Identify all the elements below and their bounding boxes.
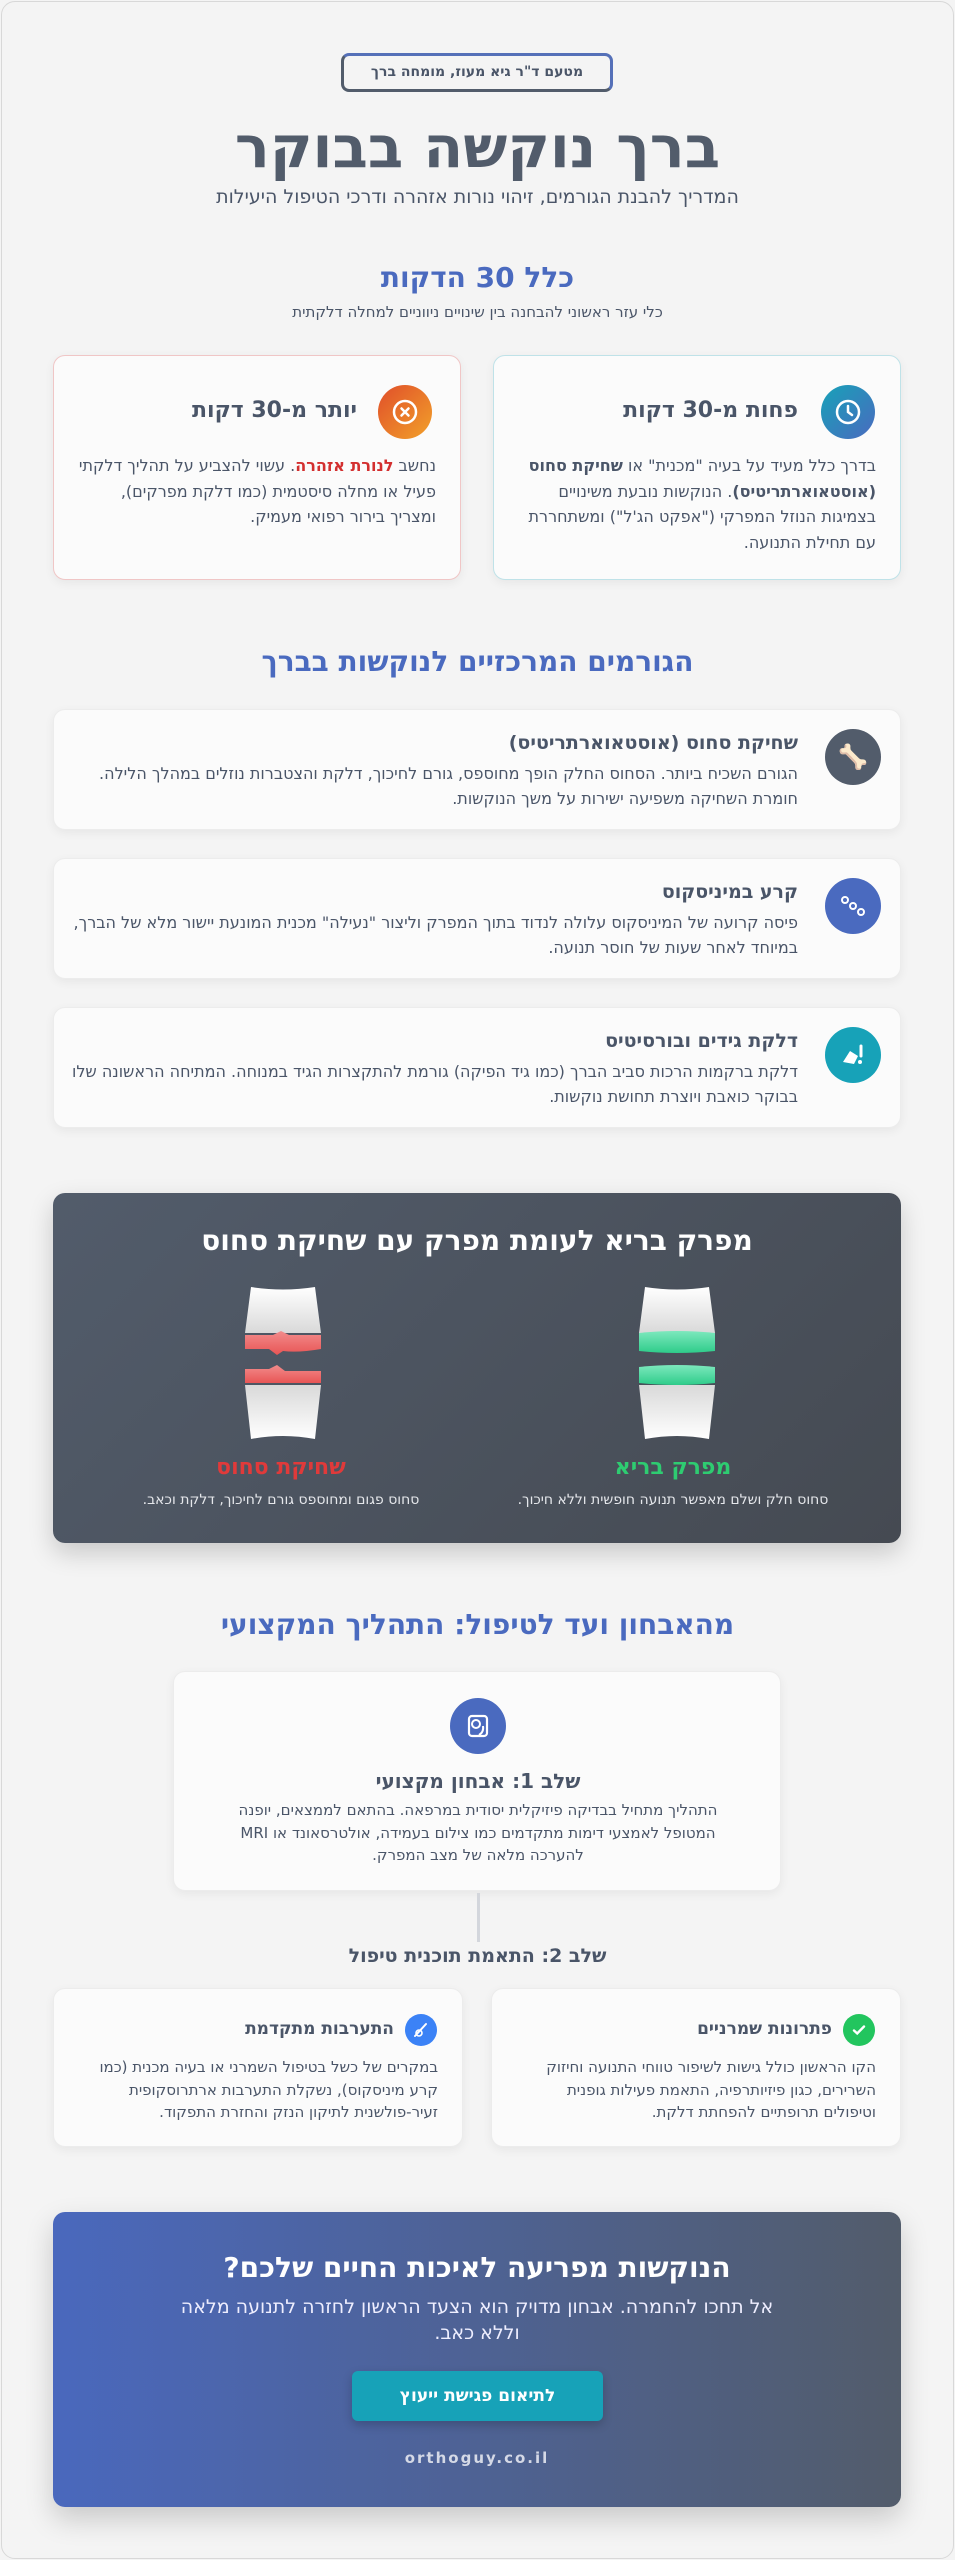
badge: author <box>341 53 613 92</box>
cta text <box>181 2296 773 2344</box>
step 1 text <box>239 1801 717 1864</box>
cause text: הגורם השכיח ביותר. הסחוס החלק הופך מחוספס, גורם לחיכוך, דלקת והצטברות נוזלים במהלך הלילה. <box>99 764 798 783</box>
subtitle: המדריך להבנת הגורמים, זיהוי נורות אזהרה ודרכי הטיפול היעילות <box>216 186 739 208</box>
card title: יותר מ-30 דקות <box>192 398 357 423</box>
icon: alert <box>825 1027 881 1083</box>
card: less than 30 minutes <box>493 355 901 580</box>
card text: בדרך כלל מעיד על בעיה "מכנית" או שחיקת סחוס <box>529 456 876 475</box>
step 1 text: המטופל לאמצעי דימות מתקדמים כמו צילום בעמידה, אולטרסאונד או MRI <box>240 1824 716 1842</box>
text: healthy: סחוס חלק ושלם מאפשר תנועה חופשית וללא חיכוך. <box>518 1492 828 1508</box>
icon: bone: 🦴 <box>838 743 868 771</box>
cause: meniscus tear <box>53 858 901 979</box>
cause: osteoarthritis <box>53 709 901 830</box>
text: במקרים של כשל בטיפול השמרני או בעיה מכנית (כמו <box>99 2058 438 2076</box>
text: הקו הראשון כולל גישות לשיפור טווחי התנועה וחיזוק <box>546 2058 876 2076</box>
heading: main causes: הגורמים המרכזיים לנוקשות בברך <box>262 645 693 678</box>
cta title: הנוקשות מפריעה לאיכות החיים שלכם? <box>223 2251 731 2284</box>
step 1 text: התהליך מתחיל בבדיקה פיזיקלית יסודית במרפאה. בהתאם לממצאים, יופנה <box>239 1801 717 1819</box>
website: orthoguy.co.il <box>405 2449 549 2467</box>
icon: scan <box>450 1698 506 1754</box>
label: worn: שחיקת סחוס <box>216 1455 346 1480</box>
icon: clock <box>821 385 875 439</box>
title: ברך נוקשה בבוקר <box>235 113 720 181</box>
subheading: rule: כלי עזר ראשוני להבחנה בין שינויים ניווניים למחלה דלקתית <box>292 303 663 321</box>
cause text: בבוקר כואבת ויוצרת תחושת נוקשות. <box>549 1087 798 1106</box>
card text <box>79 456 436 526</box>
cause title: דלקת גידים ובורסיטיס <box>605 1030 798 1052</box>
heading: diagnosis to treatment: מהאבחון ועד לטיפול: התהליך המקצועי <box>221 1608 734 1641</box>
icon: fragments <box>825 878 881 934</box>
step 1 title: שלב 1: אבחון מקצועי <box>376 1769 580 1793</box>
connector line <box>477 1893 480 1942</box>
cause text: דלקת ברקמות הרכות סביב הברך (כמו גיד הפיקה) גורמת להתקצרות הגיד במנוחה. המתיחה הראשונה שלו <box>72 1062 798 1081</box>
cta button: לתיאום פגישת ייעוץ <box>400 2386 555 2406</box>
card title: פחות מ-30 דקות <box>623 398 798 423</box>
diagram: worn joint <box>245 1287 321 1439</box>
text: זעיר-פולשנית לתיקון הנזק והחזרת התפקוד. <box>159 2103 438 2121</box>
text: השרירים, כגון פיזיותרפיה, התאמת פעילות גופנית <box>567 2080 876 2098</box>
call to action panel <box>53 2212 901 2507</box>
diagram: healthy joint <box>639 1287 715 1439</box>
cause text <box>74 913 798 957</box>
text: קרע מיניסקוס), נשקלת התערבות ארתרוסקופית <box>129 2080 438 2098</box>
cta button <box>352 2371 603 2421</box>
card text <box>528 456 876 552</box>
cause title: שחיקת סחוס (אוסטאוארתריטיס) <box>509 732 798 754</box>
step 2 heading: שלב 2: התאמת תוכנית טיפול <box>349 1945 606 1967</box>
card text: פעיל או מחלה סיסטמית (כמו דלקת מפרקים), <box>121 482 436 500</box>
cause title: קרע במיניסקוס <box>662 881 798 903</box>
icon: scalpel <box>405 2014 437 2046</box>
title: התערבות מתקדמת <box>245 2019 394 2039</box>
text <box>99 2058 438 2121</box>
card: more than 30 minutes <box>53 355 461 580</box>
text: וטיפולים תרופתיים להפחתת דלקת. <box>652 2103 876 2121</box>
cause text: במיוחד לאחר שעות של חוסר תנועה. <box>548 938 798 957</box>
panel title: מפרק בריא לעומת מפרק עם שחיקת סחוס <box>201 1224 753 1257</box>
card text: נחשב לנורת אזהרה. עשוי להצביע על תהליך דלקתי <box>79 456 436 475</box>
card text: (אוסטאוארתריטיס). הנוקשות נובעת משינויים <box>558 482 876 500</box>
card: advanced intervention <box>53 1988 463 2147</box>
heading: 30 minute rule: כלל 30 הדקות <box>381 261 574 294</box>
cause: tendinitis and bursitis <box>53 1007 901 1128</box>
cta text: וללא כאב. <box>434 2322 520 2344</box>
cause text <box>72 1062 798 1106</box>
cause text <box>99 764 798 808</box>
text <box>546 2058 876 2121</box>
card text: ומצריך בירור רפואי מעמיק. <box>250 507 436 526</box>
step 1 text: להערכה מלאה של מצב המפרק. <box>372 1846 584 1864</box>
card: conservative solutions <box>491 1988 901 2147</box>
panel: healthy vs worn joint <box>53 1193 901 1543</box>
icon: check <box>843 2014 875 2046</box>
card text: עם תחילת התנועה. <box>744 532 876 552</box>
text: worn: סחוס פגום ומחוספס גורם לחיכוך, דלקת וכאב. <box>143 1492 419 1508</box>
step 1 card <box>173 1671 781 1891</box>
badge: author: מטעם ד"ר גיא מעוז, מומחה ברך <box>371 64 583 80</box>
title: פתרונות שמרניים <box>697 2019 832 2039</box>
cta text: אל תחכו להחמרה. אבחון מדויק הוא הצעד הראשון לחזרה לתנועה מלאה <box>181 2296 773 2318</box>
label: healthy: מפרק בריא <box>615 1455 731 1480</box>
icon: x <box>378 385 432 439</box>
card text: בצמיגות הנוזל המפרקי ("אפקט הג'ל") ומשתחררת <box>529 507 876 526</box>
cause text: פיסה קרועה של המיניסקוס עלולה לנדוד בתוך המפרק וליצור "נעילה" מכנית המונעת יישור מלא של הברך, <box>74 913 798 932</box>
icon: bone <box>825 729 881 785</box>
cause text: חומרת השחיקה משפיעה ישירות על משך הנוקשות. <box>452 789 798 808</box>
